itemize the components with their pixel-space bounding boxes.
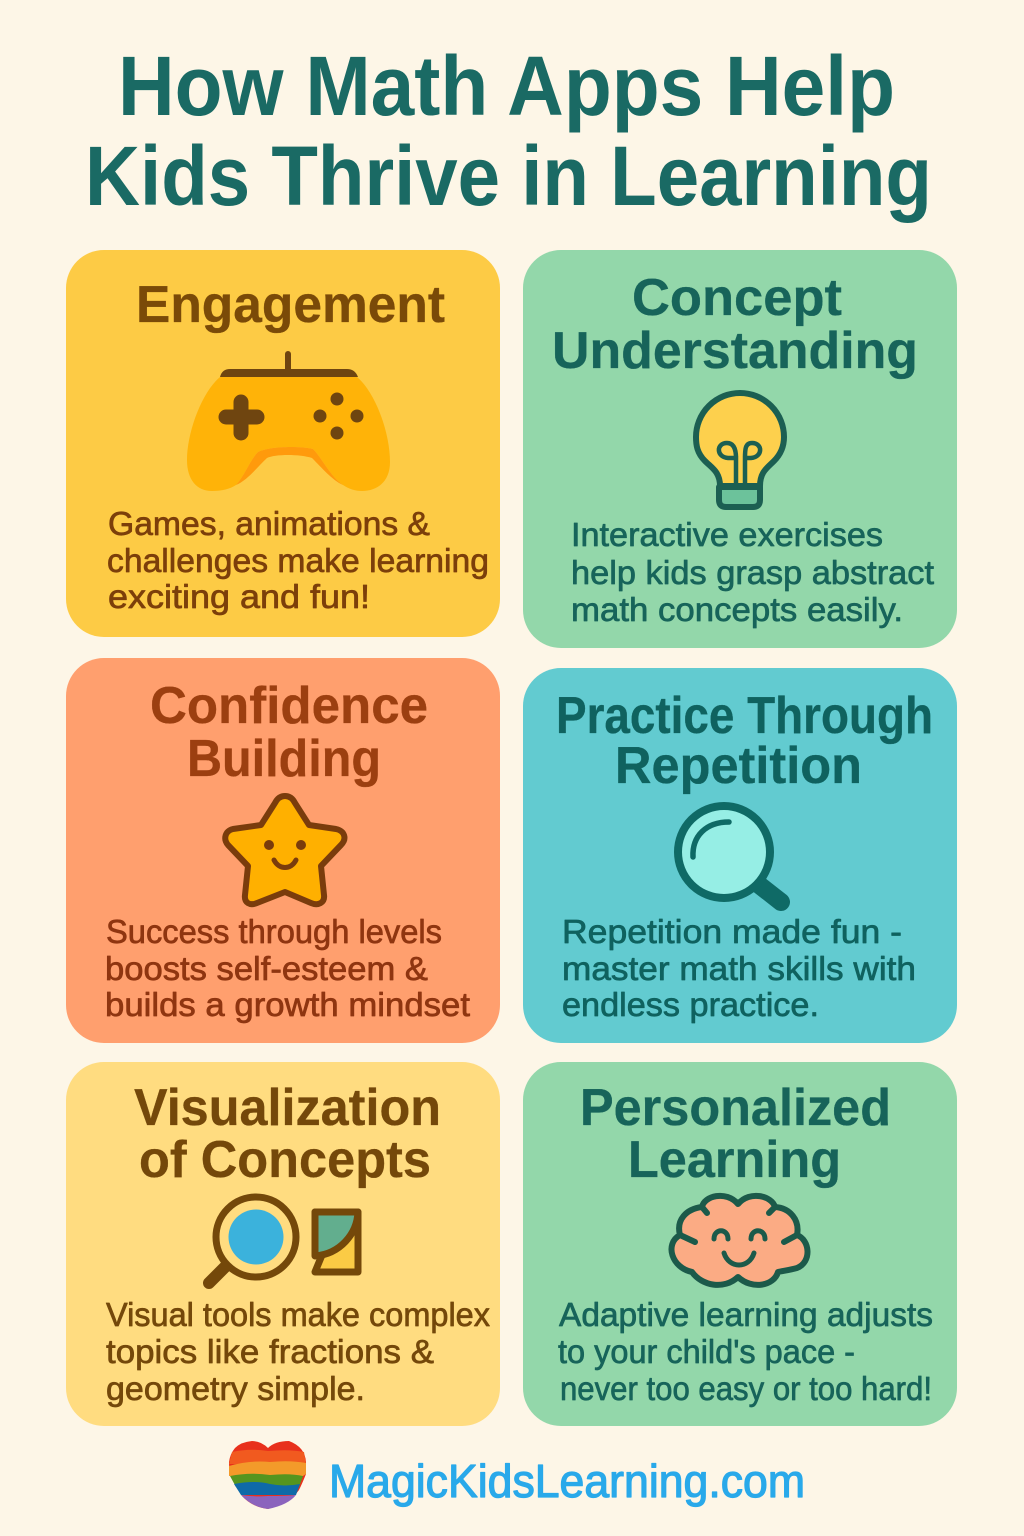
body text: engagement xyxy=(107,505,489,615)
heading: personalized learning: Learning xyxy=(628,1131,841,1189)
heading: confidence building: Building xyxy=(187,730,381,788)
panel: visualization of concepts xyxy=(66,1062,500,1426)
body text: visualization of concepts xyxy=(106,1296,490,1407)
heading: personalized learning: Personalized xyxy=(580,1079,891,1137)
body text: confidence building xyxy=(105,913,470,1023)
icon: smiling star xyxy=(225,796,344,904)
title: How Math Apps Help xyxy=(118,39,895,133)
heading: engagement: Engagement xyxy=(136,276,445,334)
heading: practice through repetition: Practice Through xyxy=(556,687,933,745)
body text: personalized learning: to your child's pace - xyxy=(558,1333,855,1370)
heading: personalized learning xyxy=(580,1079,891,1189)
heading: visualization of concepts: of Concepts xyxy=(139,1131,431,1189)
panel: practice through repetition xyxy=(523,668,957,1043)
footer logo: rainbow heart xyxy=(229,1441,306,1509)
icon: game controller xyxy=(187,354,390,491)
panel: confidence building xyxy=(66,658,500,1043)
heading: visualization of concepts: Visualization xyxy=(134,1079,441,1137)
body text: concept understanding: help kids grasp abstract xyxy=(571,554,934,591)
heading: concept understanding: Understanding xyxy=(552,322,918,380)
heading: practice through repetition xyxy=(556,687,933,795)
body text: engagement: Games, animations & xyxy=(108,505,430,542)
title xyxy=(85,39,932,223)
body text: confidence building: Success through levels xyxy=(106,913,442,950)
heading: visualization of concepts xyxy=(134,1079,441,1189)
body text: personalized learning: Adaptive learning adjusts xyxy=(559,1296,933,1333)
body text: practice through repetition xyxy=(562,913,916,1023)
body text: engagement: exciting and fun! xyxy=(108,578,370,615)
title: Kids Thrive in Learning xyxy=(85,129,932,223)
body text: confidence building: builds a growth mindset xyxy=(105,986,470,1023)
body text: concept understanding: math concepts easily. xyxy=(571,591,903,628)
heading: concept understanding: Concept xyxy=(632,269,842,327)
body text: confidence building: boosts self-esteem & xyxy=(105,950,428,987)
body text: personalized learning: never too easy or too hard! xyxy=(560,1370,932,1407)
panel: concept understanding xyxy=(523,250,957,648)
body text: visualization of concepts: geometry simple. xyxy=(106,1370,365,1407)
body text: practice through repetition: master math skills with xyxy=(562,950,916,987)
heading: confidence building: Confidence xyxy=(150,677,428,735)
heading: practice through repetition: Repetition xyxy=(615,737,862,795)
body text: practice through repetition: Repetition made fun - xyxy=(562,913,902,950)
footer website: MagicKidsLearning.com xyxy=(329,1455,805,1507)
body text: concept understanding xyxy=(571,516,934,628)
icon: smiling brain xyxy=(671,1196,808,1285)
panel: personalized learning xyxy=(523,1062,957,1426)
icon: magnifier and fraction shape xyxy=(209,1197,358,1283)
body text: personalized learning xyxy=(558,1296,933,1407)
panel: engagement xyxy=(66,250,500,637)
body text: practice through repetition: endless practice. xyxy=(562,986,819,1023)
body text: visualization of concepts: topics like fractions & xyxy=(106,1333,434,1370)
heading: confidence building xyxy=(150,677,428,788)
icon: light bulb xyxy=(696,393,784,507)
body text: visualization of concepts: Visual tools make complex xyxy=(106,1296,490,1333)
heading: concept understanding xyxy=(552,269,918,380)
body text: concept understanding: Interactive exercises xyxy=(571,516,883,553)
body text: engagement: challenges make learning xyxy=(107,542,489,579)
icon: magnifying glass xyxy=(678,806,781,902)
